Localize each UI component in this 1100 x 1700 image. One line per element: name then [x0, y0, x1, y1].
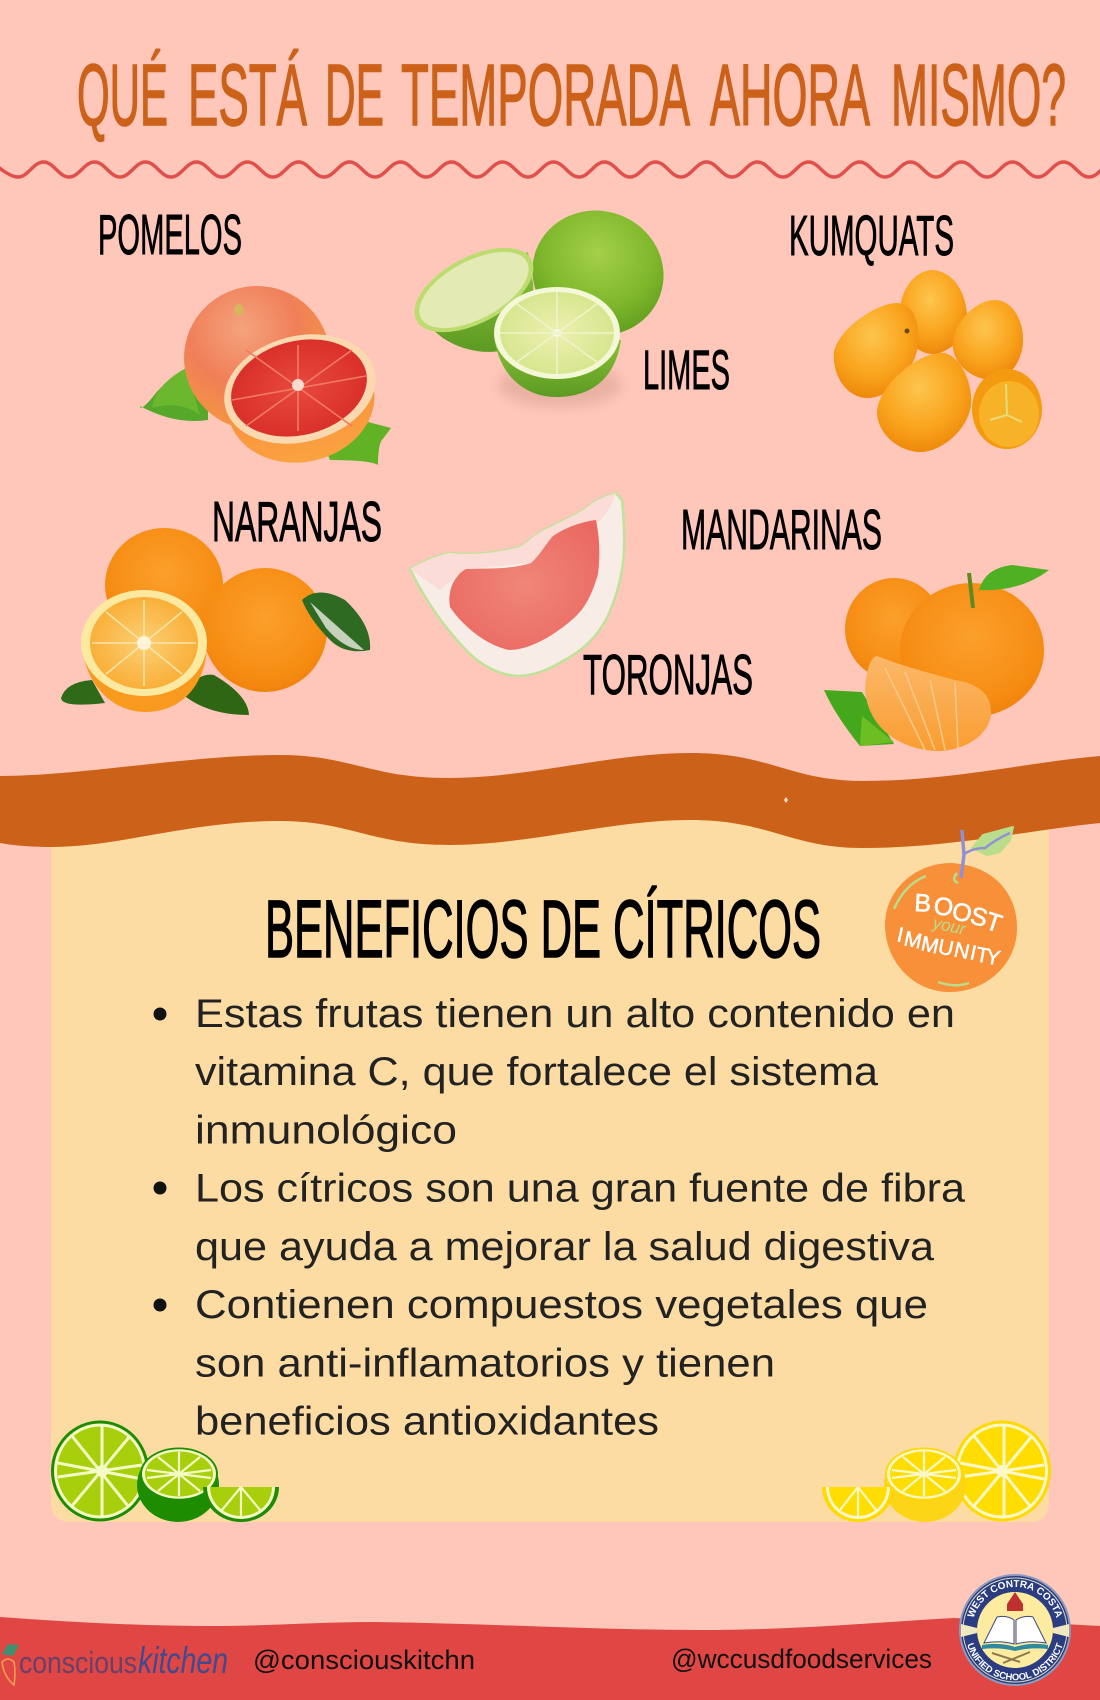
- label: kumquats: KUMQUATS: [789, 204, 954, 268]
- bullet list: [154, 992, 966, 1444]
- label: toronjas: TORONJAS: [583, 643, 753, 707]
- seal: west contra costa unified school district: UNIFIED SCHOOL DISTRICT: [968, 1642, 1062, 1680]
- icon: lemon slices: [822, 1420, 1051, 1522]
- bullet list: Estas frutas tienen un alto contenido en: [195, 992, 955, 1036]
- logo: conscious kitchen: conscious: [19, 1645, 137, 1680]
- wavy divider: [0, 162, 1100, 177]
- icon: boost your immunity orange: IMMUNITY: [895, 923, 1002, 970]
- logo: conscious kitchen: [2, 1640, 228, 1685]
- title: TEMPORADA: [401, 47, 690, 144]
- fruit: pomelos: [140, 286, 391, 476]
- icon: boost your immunity orange: your: [930, 913, 969, 939]
- content panel: [51, 800, 1049, 1522]
- icon: boost your immunity orange: [885, 827, 1017, 992]
- icon: lime slices: [51, 1420, 279, 1522]
- footer handle: wccusd: @wccusdfoodservices: [671, 1644, 932, 1674]
- title: AHORA: [710, 47, 870, 144]
- icon: boost your immunity orange: BOOST: [914, 889, 1005, 938]
- footer band: [0, 1617, 1100, 1700]
- fruit: mandarinas: [824, 565, 1049, 751]
- bullet list: vitamina C, que fortalece el sistema: [195, 1050, 879, 1094]
- footer handle: conscious kitchen: @consciouskitchn: [253, 1645, 475, 1675]
- fruit: limes: [401, 192, 681, 407]
- title: DE: [325, 47, 384, 144]
- label: limes: LIMES: [643, 338, 730, 401]
- label: mandarinas: MANDARINAS: [681, 498, 882, 562]
- fruit: naranjas: [61, 528, 370, 715]
- bullet list: beneficios antioxidantes: [195, 1400, 659, 1444]
- bullet list: son anti-inflamatorios y tienen: [195, 1342, 775, 1386]
- label: pomelos: POMELOS: [98, 203, 242, 267]
- title: ESTÁ: [188, 47, 307, 144]
- seal: west contra costa unified school district: WEST CONTRA COSTA: [967, 1580, 1062, 1618]
- title: [77, 47, 1066, 144]
- label: naranjas: NARANJAS: [212, 490, 382, 554]
- bullet list: que ayuda a mejorar la salud digestiva: [195, 1225, 935, 1269]
- wavy orange band: [0, 753, 1100, 848]
- seal: west contra costa unified school district: [959, 1574, 1071, 1686]
- bullet list: Los cítricos son una gran fuente de fibra: [195, 1166, 966, 1210]
- fruit: kumquats: [834, 270, 1042, 452]
- title: QUÉ: [77, 47, 168, 144]
- bullet list: Contienen compuestos vegetales que: [195, 1283, 928, 1327]
- logo: conscious kitchen: kitchen: [138, 1640, 228, 1681]
- fruit: toronjas: [410, 493, 624, 676]
- bullet list: inmunológico: [195, 1108, 457, 1152]
